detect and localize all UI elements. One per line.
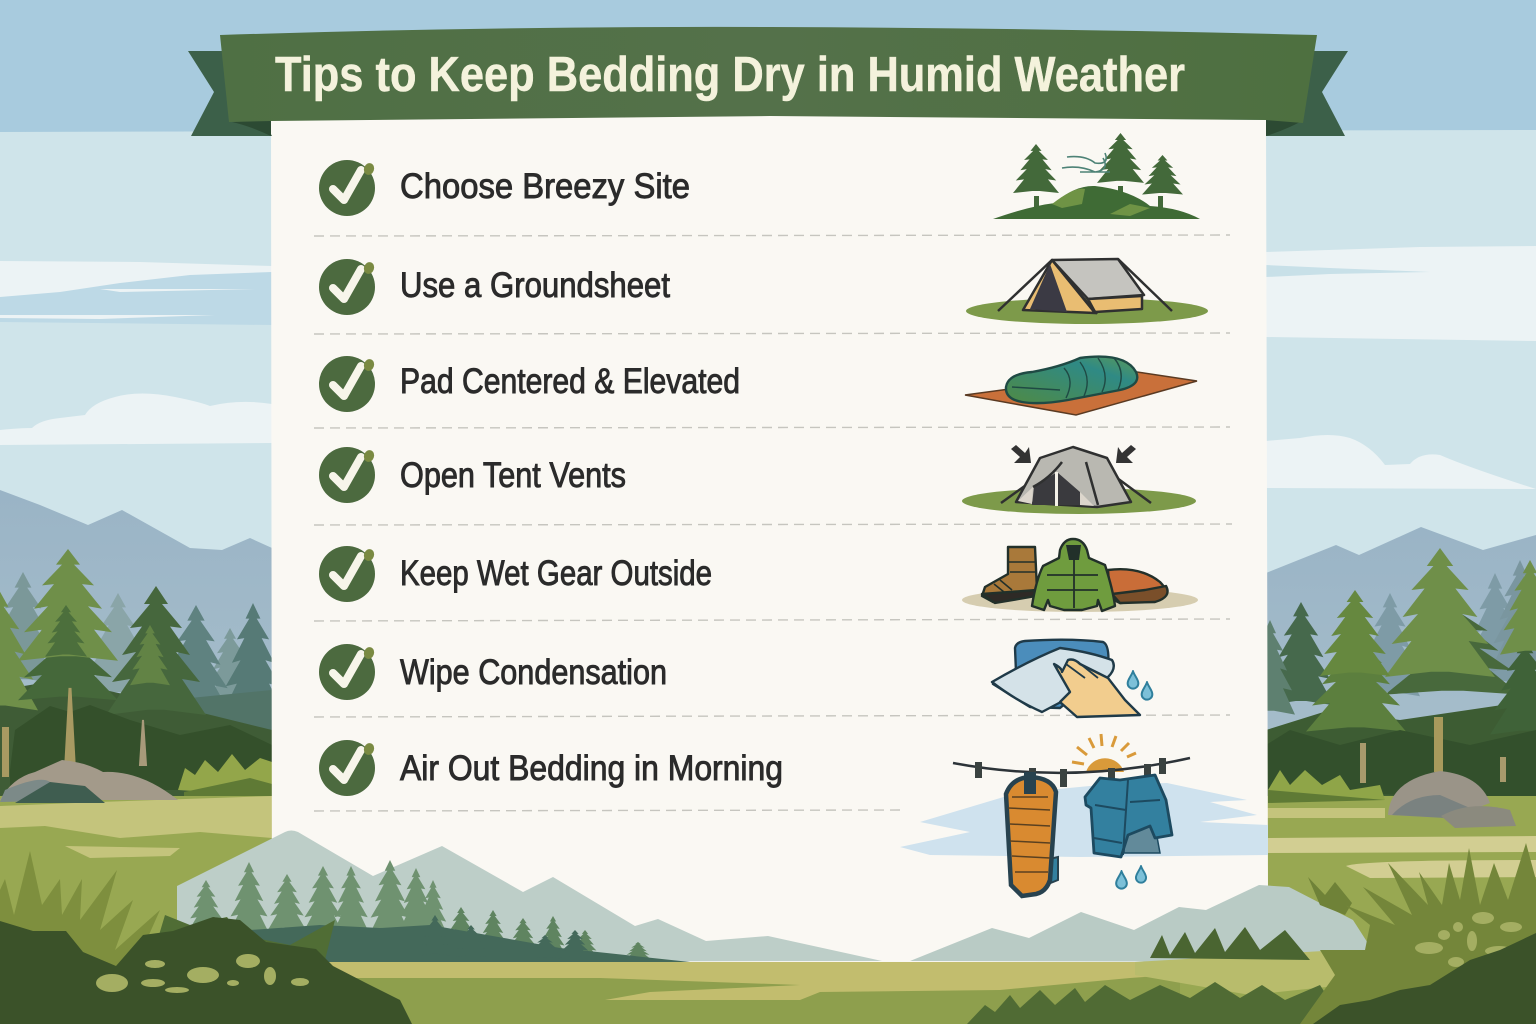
icon: sleeping pad and bag: [965, 357, 1197, 415]
icon: breezy hill with pines: [993, 133, 1200, 219]
blue jacket: [1085, 775, 1172, 857]
tip label: Air Out Bedding in Morning: [400, 749, 783, 788]
foreground: meadow strip: [300, 962, 1240, 1024]
background: meadow base: [0, 796, 1536, 1024]
background: right forest: [1245, 548, 1536, 800]
vent arrow right: [1116, 445, 1136, 463]
check icon: [319, 356, 376, 412]
background: far mountains: [0, 490, 1536, 800]
check icon: [319, 160, 376, 216]
title: Tips to Keep Bedding Dry in Humid Weather: [275, 48, 1185, 102]
tip label: Choose Breezy Site: [400, 167, 690, 206]
foreground: right ferns: [1300, 843, 1536, 1024]
banner ribbon: [188, 27, 1348, 136]
row 2: use a groundsheet: [319, 259, 670, 315]
panel: tips card: [271, 115, 1272, 962]
grey jacket lining: [1124, 825, 1160, 853]
jacket: [1032, 539, 1115, 611]
tip label: Wipe Condensation: [400, 653, 667, 692]
vent arrow left: [1011, 445, 1031, 463]
clothesline: [953, 758, 1190, 773]
icon: drying line with sun: [900, 734, 1268, 896]
icon: boot, jacket and bag: [962, 539, 1198, 612]
tip label: Keep Wet Gear Outside: [400, 554, 712, 593]
ribbon fold shadows: [232, 120, 1300, 136]
bag: [1108, 569, 1166, 603]
row 4: open tent vents: [319, 447, 626, 503]
foreground: pines over mountains: [188, 860, 690, 962]
background: clouds: [0, 246, 1536, 489]
icon: tent on groundsheet: [966, 259, 1208, 324]
clothespins: [975, 758, 1166, 787]
background: right meadow light patches: [1266, 808, 1536, 878]
falling drops: [1116, 871, 1127, 889]
icon: second falling drop: [1136, 866, 1146, 883]
sun: [1086, 758, 1124, 772]
orange sleeping bag: [1006, 777, 1056, 896]
background: left forest: [0, 549, 284, 800]
check icon: [319, 546, 376, 602]
foreground: left fern and bushes: [0, 851, 412, 1024]
foreground: mountains over card: [177, 830, 1380, 962]
row 5: keep wet gear outside: [319, 546, 712, 602]
tip label: Pad Centered & Elevated: [400, 362, 740, 401]
background: right rocks and shrubs: [1268, 770, 1516, 828]
background: left meadow light patches: [0, 796, 272, 858]
teal bag liner: [1045, 857, 1058, 884]
ribbon left tail: [188, 51, 272, 136]
check icon: [319, 740, 376, 796]
row 7: air out bedding in morning: [319, 740, 783, 796]
check icon: [319, 644, 376, 700]
foreground: right mid grass: [967, 927, 1345, 1024]
row 3: pad centered and elevated: [319, 356, 740, 412]
background: left rocks and shrubs: [0, 754, 272, 803]
tip label: Open Tent Vents: [400, 456, 626, 495]
icon: tent with open vents: [962, 445, 1196, 514]
icon: water drop one: [1128, 671, 1138, 689]
row 1: choose breezy site: [319, 160, 690, 216]
boot: [982, 547, 1037, 602]
icon: hand wiping with cloth: [992, 640, 1140, 717]
check icon: [319, 259, 376, 315]
ribbon right tail: [1266, 51, 1348, 136]
tip label: Use a Groundsheet: [400, 266, 670, 305]
check icon: [319, 447, 376, 503]
icon: water drop two: [1142, 682, 1152, 700]
background: upper sky band: [0, 0, 1536, 132]
ribbon body: [220, 27, 1317, 123]
pale blue cloud: [900, 783, 1268, 857]
row 6: wipe condensation: [319, 644, 667, 700]
